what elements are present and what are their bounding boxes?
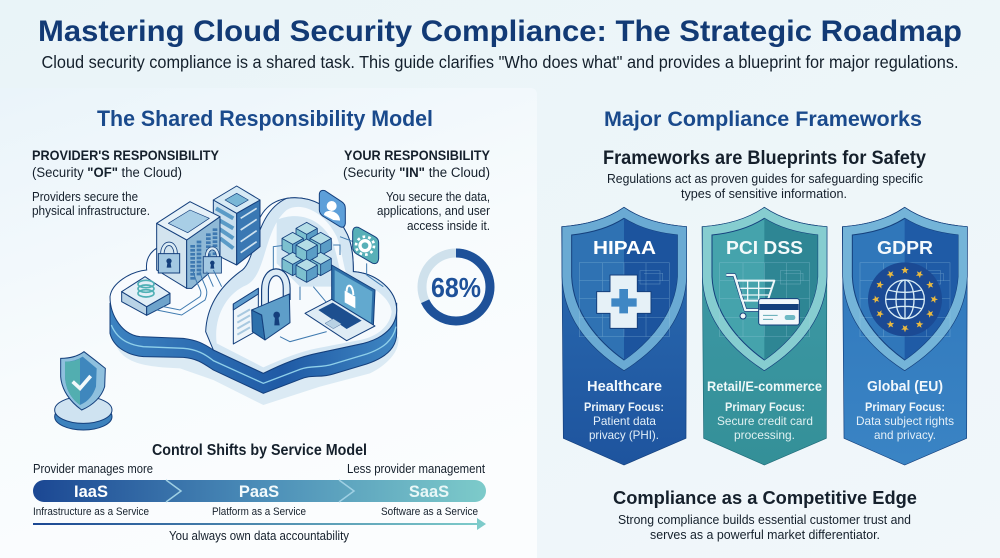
text block: provider's responsibility: Providers secure the: [32, 190, 138, 204]
card: PCI DSS: [702, 207, 827, 465]
text block: provider's responsibility: (Security "OF" the Cloud): [32, 165, 182, 180]
text block: your responsibility: YOUR RESPONSIBILITY: [344, 147, 491, 163]
text block: your responsibility: [343, 147, 491, 233]
back server rack: [213, 186, 260, 265]
subheading: blueprints: Frameworks are Blueprints for Safety: [603, 148, 926, 169]
card: GDPR: and privacy.: [874, 428, 936, 442]
user icon tile: [319, 190, 345, 227]
front server with locks: [157, 202, 220, 288]
browser window: [233, 288, 258, 344]
title: Mastering Cloud Security Compliance: The Strategic Roadmap: [38, 15, 962, 48]
card: GDPR: [842, 207, 967, 465]
large padlock: [252, 272, 290, 340]
card: HIPAA: privacy (PHI).: [589, 428, 659, 442]
text block: your responsibility: access inside it.: [407, 219, 490, 233]
text block: competitive edge: serves as a powerful market differentiator.: [650, 528, 880, 542]
card: PCI DSS: Secure credit card: [717, 414, 813, 428]
card: HIPAA: Primary Focus:: [584, 400, 664, 414]
text block: provider's responsibility: [32, 147, 220, 218]
gear icon tile: [353, 227, 379, 264]
heading: frameworks: Major Compliance Frameworks: [604, 108, 922, 131]
arrow: data accountability: [33, 518, 486, 530]
illustration: isometric secure cloud: [110, 186, 399, 405]
text block: competitive edge: Strong compliance builds essential customer trust and: [618, 513, 911, 527]
label: data accountability: You always own data accountability: [169, 529, 350, 543]
card: HIPAA: Healthcare: [587, 379, 662, 395]
cloud shadow: [115, 337, 399, 405]
heading: competitive edge: Compliance as a Competitive Edge: [613, 487, 917, 508]
text block: your responsibility: You secure the data,: [386, 190, 490, 204]
card: PCI DSS: Primary Focus:: [725, 400, 805, 414]
subtitle: Cloud security compliance is a shared task. This guide clarifies "Who does what" and provides a blueprint for major regulations.: [42, 52, 958, 72]
icon: shopping cart: [726, 275, 774, 319]
inner cloud ribbon: [206, 198, 397, 373]
service model descriptions: [33, 506, 478, 518]
icon: shield on pedestal: [55, 352, 112, 430]
service model descriptions: Infrastructure as a Service: [33, 506, 149, 518]
text block: your responsibility: (Security "IN" the Cloud): [343, 165, 490, 180]
heading: shared responsibility: The Shared Responsibility Model: [97, 106, 433, 131]
card: PCI DSS: PCI DSS: [726, 238, 803, 258]
card: PCI DSS: processing.: [734, 428, 795, 442]
card: GDPR: Global (EU): [867, 379, 943, 395]
label: provider manages more: Provider manages more: [33, 462, 153, 476]
service model descriptions: Platform as a Service: [212, 506, 306, 518]
text block: provider's responsibility: PROVIDER'S RESPONSIBILITY: [32, 147, 220, 163]
text block: regulations: [607, 172, 923, 201]
storage device: [122, 277, 170, 315]
icon: EU globe: [868, 262, 942, 336]
card: GDPR: GDPR: [877, 238, 933, 258]
card: GDPR: Data subject rights: [856, 414, 954, 428]
cloud base: [110, 303, 397, 393]
icon: medical cross: [597, 275, 651, 328]
panel: compliance frameworks: [562, 108, 967, 542]
card: PCI DSS: Retail/E-commerce: [707, 378, 822, 394]
service model bar: PaaS: [239, 483, 279, 501]
card: HIPAA: HIPAA: [593, 238, 656, 258]
cables: [157, 237, 383, 342]
service model bar: [33, 480, 486, 502]
card: HIPAA: Patient data: [593, 414, 656, 428]
card: HIPAA: [562, 207, 687, 465]
data cubes: [282, 222, 331, 282]
service model bar: SaaS: [409, 483, 449, 501]
laptop: [305, 265, 375, 341]
text block: your responsibility: applications, and user: [377, 204, 490, 218]
donut chart: 68%: 68%: [431, 272, 481, 303]
text block: provider's responsibility: physical infrastructure.: [32, 204, 150, 218]
service model descriptions: Software as a Service: [381, 506, 478, 518]
icon: credit card: [759, 299, 799, 325]
text block: regulations: Regulations act as proven guides for safeguarding specific: [607, 172, 923, 186]
server padlocks: [158, 244, 221, 273]
text block: regulations: types of sensitive information.: [681, 187, 847, 201]
label: less provider management: Less provider management: [347, 462, 485, 476]
text block: competitive edge: [618, 513, 911, 542]
cloud top surface: [110, 198, 397, 373]
donut chart: 68%: [422, 253, 490, 321]
service model bar: IaaS: [74, 483, 108, 501]
panel: shared responsibility model: [0, 88, 537, 558]
card: GDPR: Primary Focus:: [865, 400, 945, 414]
heading: control shifts: Control Shifts by Service Model: [152, 442, 367, 459]
